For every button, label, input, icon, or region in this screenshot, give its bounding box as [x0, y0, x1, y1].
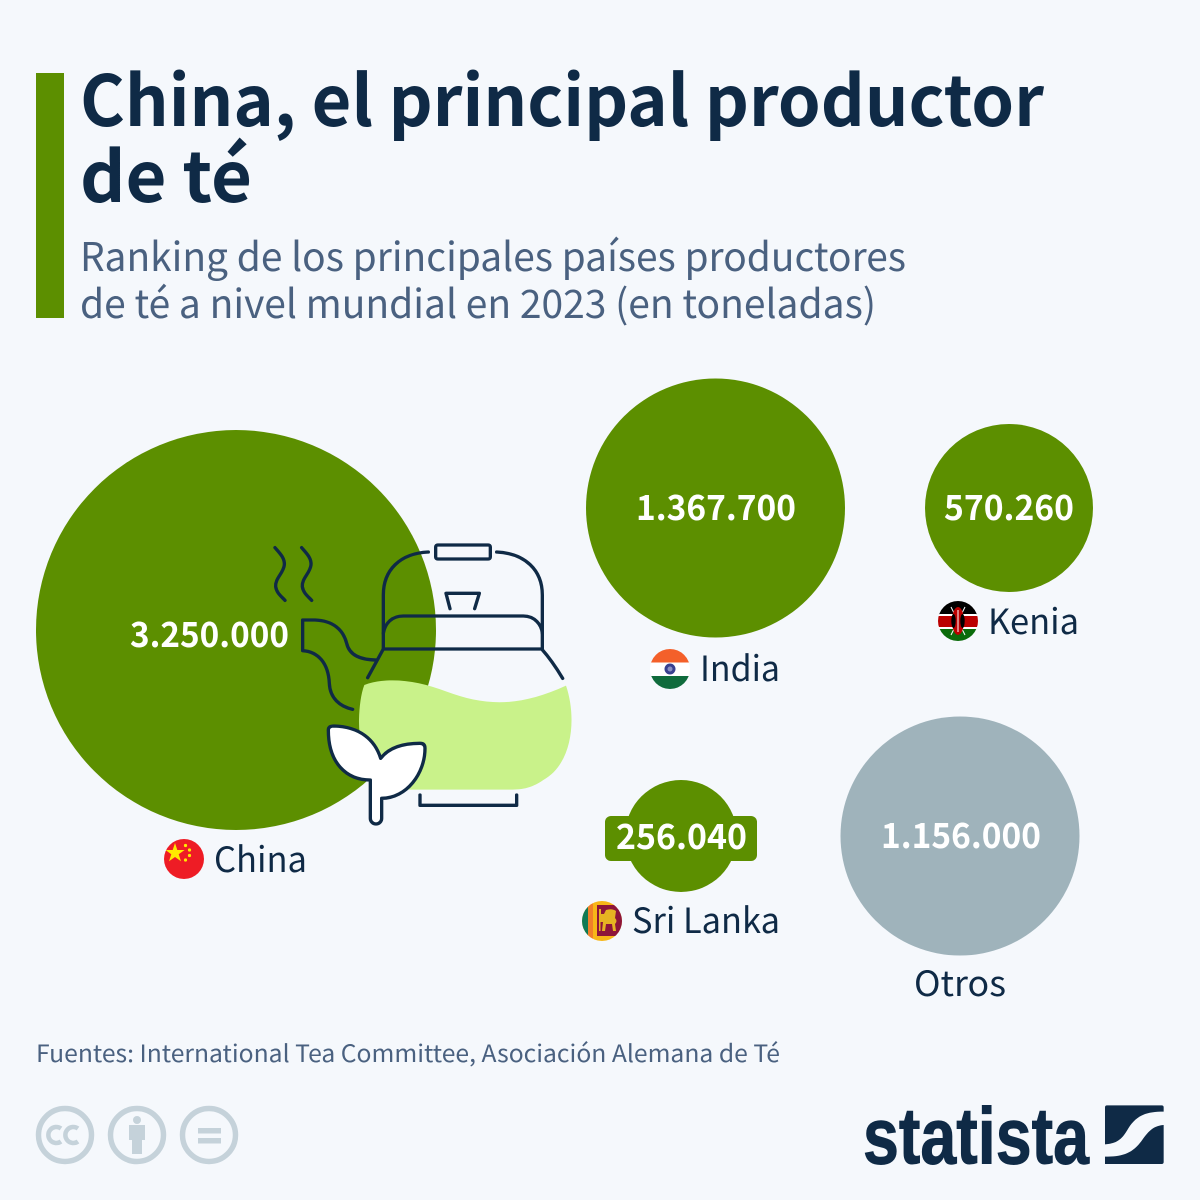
- icon: attribution: [110, 1108, 164, 1162]
- title: de té: [80, 122, 252, 223]
- value: India: 1.367.700: [636, 480, 796, 531]
- bubble: Kenia: [925, 424, 1093, 592]
- title: China, el principal productor: [80, 46, 1044, 147]
- logo: statista: statista: [863, 1092, 1089, 1180]
- value: China: 3.250.000: [130, 607, 289, 658]
- flag: China: [164, 839, 204, 879]
- illustration: teapot with leaf: [275, 545, 572, 824]
- value: Kenia: 570.260: [944, 480, 1074, 531]
- label: Otros: Otros: [914, 956, 1006, 1007]
- label: Sri Lanka: Sri Lanka: [632, 893, 780, 944]
- subtitle: de té a nivel mundial en 2023 (en toneladas): [80, 273, 876, 330]
- icon: creative commons: [38, 1108, 92, 1162]
- flag: Kenia: [938, 601, 978, 641]
- bubble: China: [36, 430, 436, 830]
- bubble: India: [586, 378, 845, 638]
- subtitle: [80, 226, 906, 330]
- label: China: China: [214, 832, 307, 883]
- label: Kenia: Kenia: [988, 594, 1079, 645]
- label: India: India: [700, 641, 780, 692]
- source: Fuentes: International Tea Committee, Asociación Alemana de Té: [36, 1034, 780, 1069]
- title: [80, 46, 1044, 223]
- flag: Sri Lanka: [582, 901, 623, 941]
- subtitle: Ranking de los principales países productores: [80, 226, 906, 283]
- flag: India: [650, 649, 690, 690]
- bubble: Otros: [840, 716, 1080, 956]
- title accent bar: [36, 73, 64, 318]
- value box: Sri Lanka: 256.040: [616, 809, 747, 860]
- value: Otros: 1.156.000: [881, 808, 1041, 859]
- icon: no derivatives: [182, 1108, 236, 1162]
- bubble: Sri Lanka: [625, 780, 737, 892]
